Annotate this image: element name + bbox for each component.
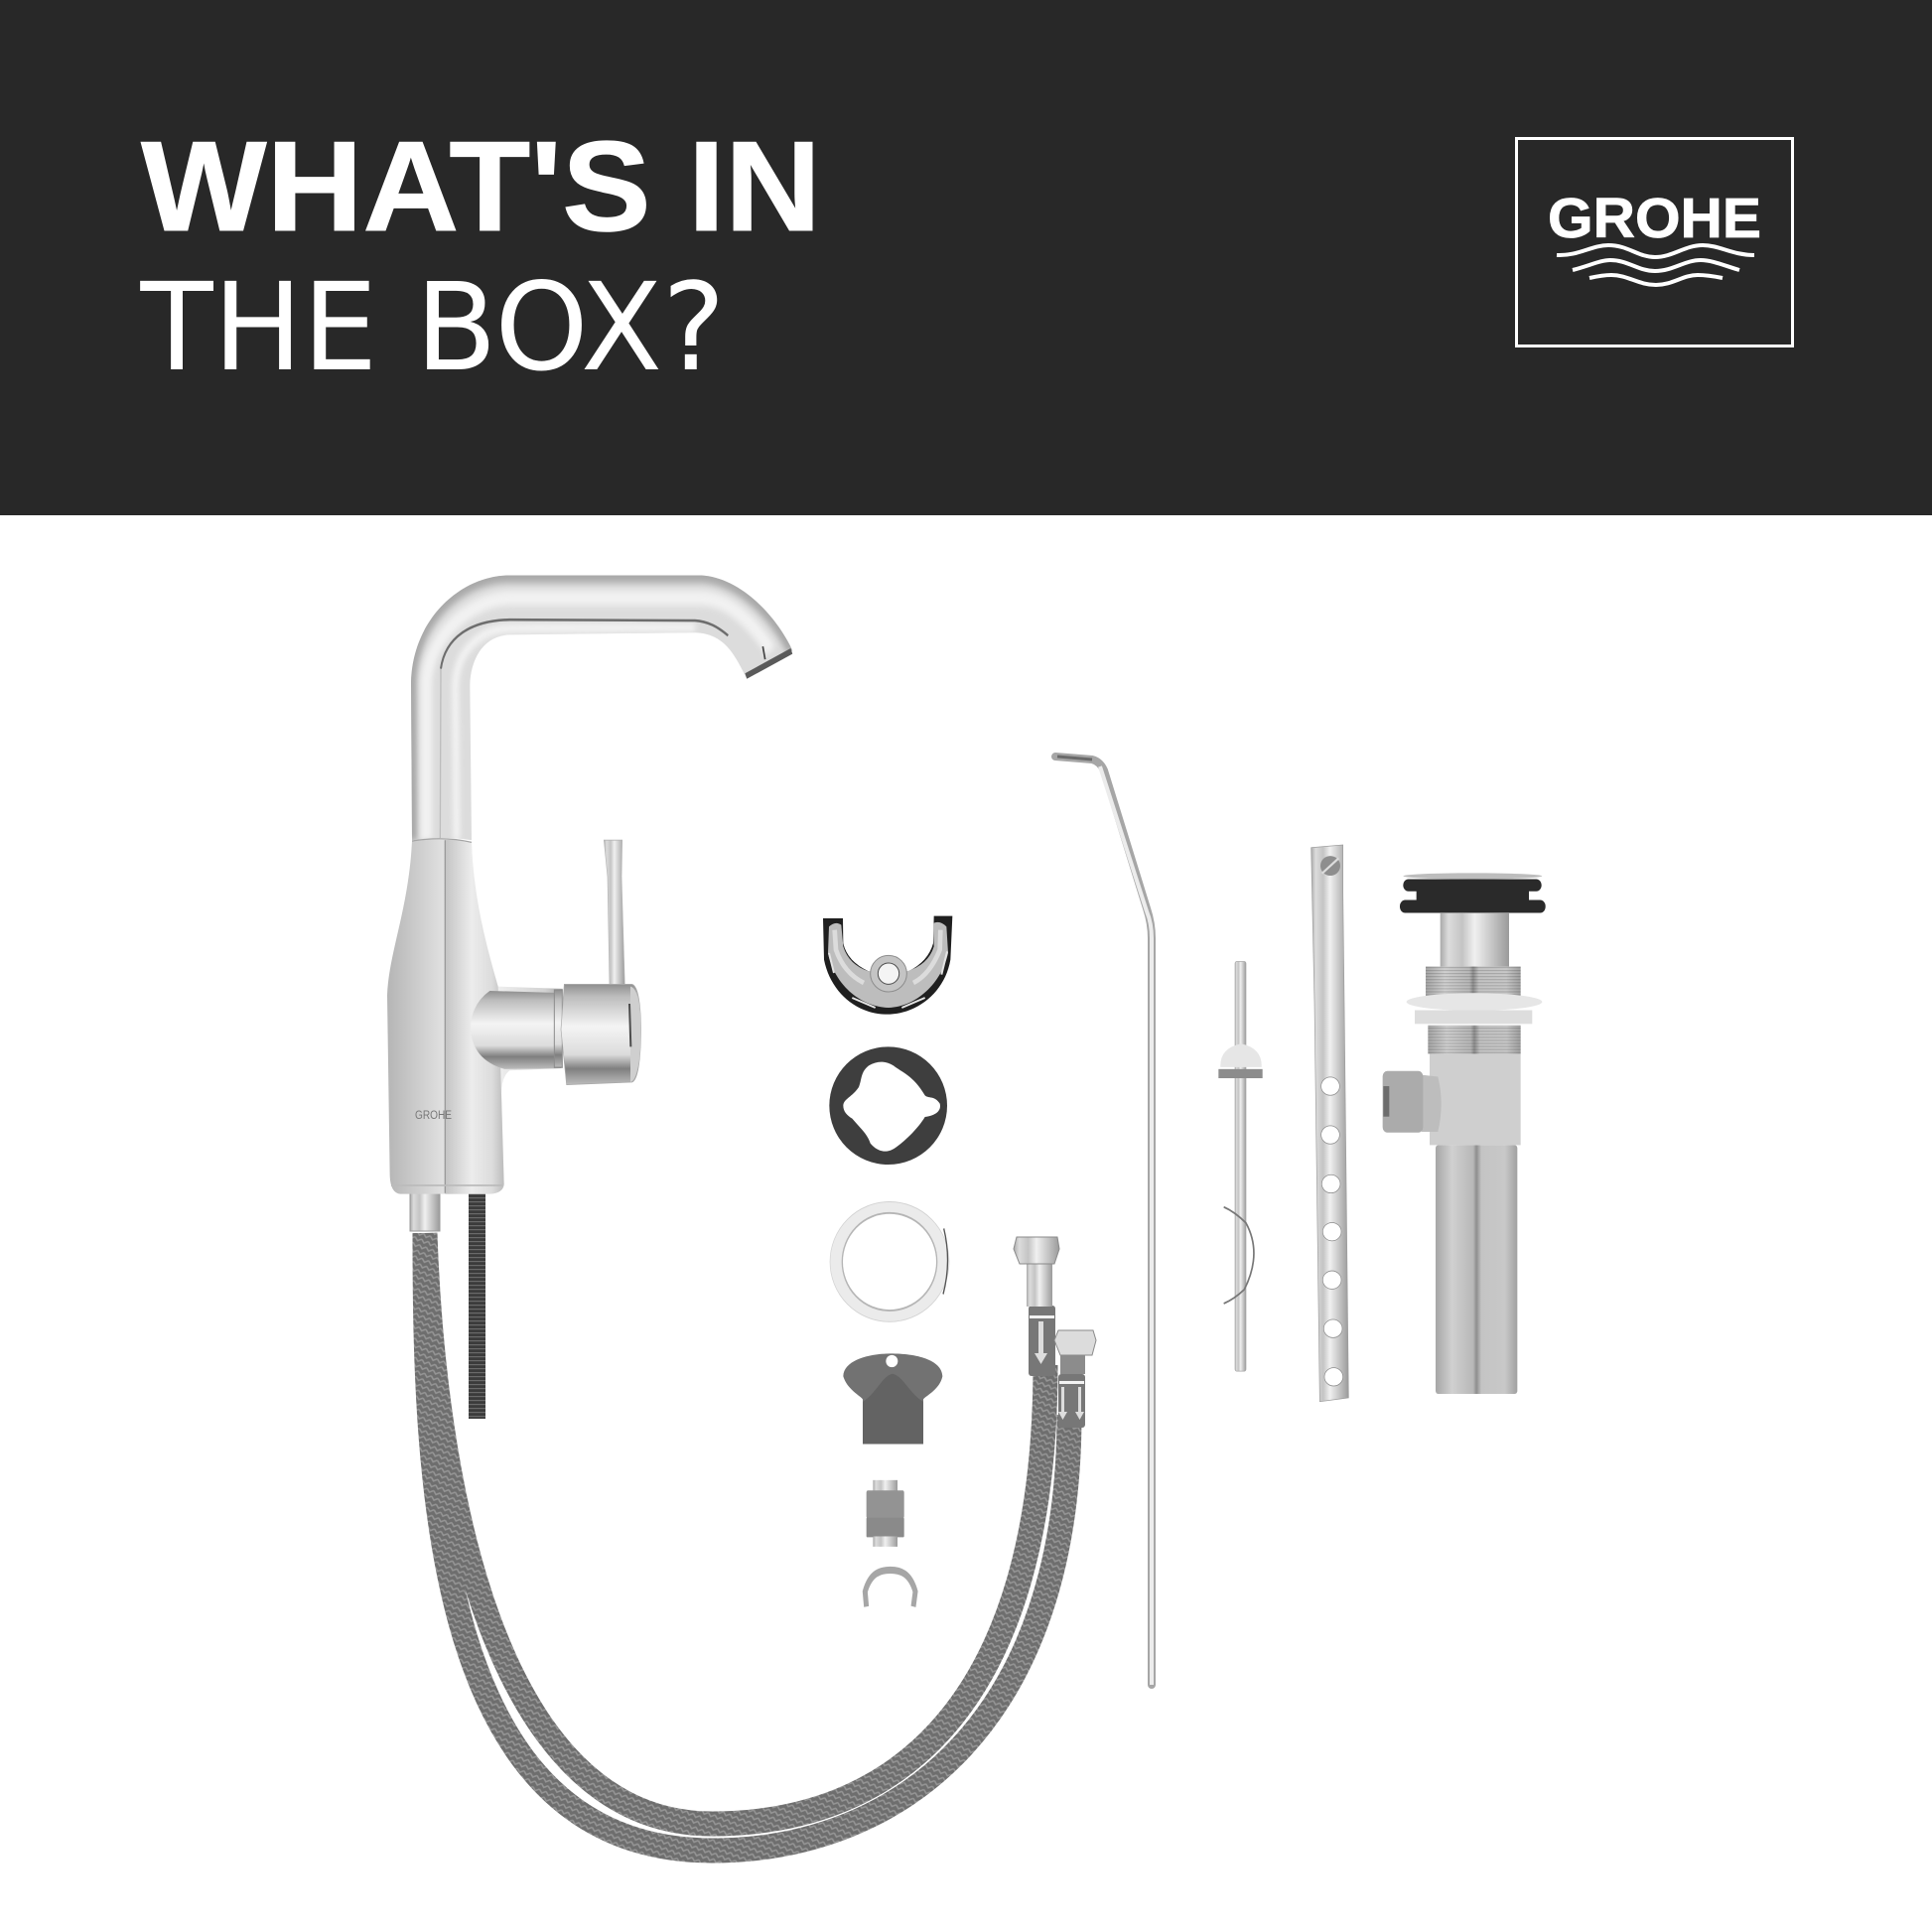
- cartridge end cap: [630, 987, 641, 1082]
- body seam: [443, 840, 447, 1193]
- small parts column: [830, 1202, 949, 1606]
- title: the box: THE BOX?: [140, 257, 725, 398]
- mixer neck: [471, 991, 561, 1069]
- title: what's in: WHAT'S IN: [141, 115, 821, 258]
- logo: GROHE in outlined box: [1517, 139, 1793, 345]
- threaded rod: [469, 1191, 485, 1419]
- part: pin rod with stopper: [1218, 962, 1263, 1371]
- collar: [554, 990, 562, 1067]
- body right half: [445, 840, 504, 1194]
- connector: faucet hose fitting: [410, 1191, 440, 1231]
- cartridge shadow: [629, 1004, 630, 1046]
- hose: inner: [425, 1233, 1045, 1824]
- spout tip highlight: [762, 646, 765, 659]
- spout crease: [441, 620, 728, 669]
- spout: [407, 569, 797, 845]
- header banner: [0, 0, 1932, 515]
- long lift rod: [1055, 757, 1152, 1685]
- part: drain assembly: [1383, 873, 1546, 1394]
- part: flow restrictor: [867, 1480, 904, 1547]
- body base line: [391, 1183, 502, 1187]
- faucet logo text: GROHE: [415, 1110, 452, 1122]
- part: perforated lever strap: [1311, 845, 1348, 1402]
- logo: GROHE in outlined box: GROHE: [1548, 187, 1761, 250]
- part: rubber gasket: [829, 1046, 947, 1165]
- connector: lower hose end: [1054, 1330, 1096, 1428]
- part: clip: [865, 1570, 915, 1606]
- braided hoses: [425, 1233, 1096, 1851]
- lever: [604, 840, 624, 987]
- body: [387, 839, 563, 1194]
- spout column seam: [438, 669, 443, 838]
- connector: upper hose end: [1014, 1237, 1059, 1376]
- hose: outer: [425, 1233, 1069, 1851]
- faucet: [387, 569, 797, 1194]
- spout mouth: [746, 651, 791, 676]
- part: chrome ring: [830, 1202, 949, 1321]
- mixer cartridge: [561, 984, 641, 1085]
- pop-up drain parts: [1218, 845, 1546, 1402]
- neck joint line: [412, 839, 472, 842]
- part: aerator key: [843, 1353, 942, 1445]
- part: U bracket: [823, 916, 952, 1015]
